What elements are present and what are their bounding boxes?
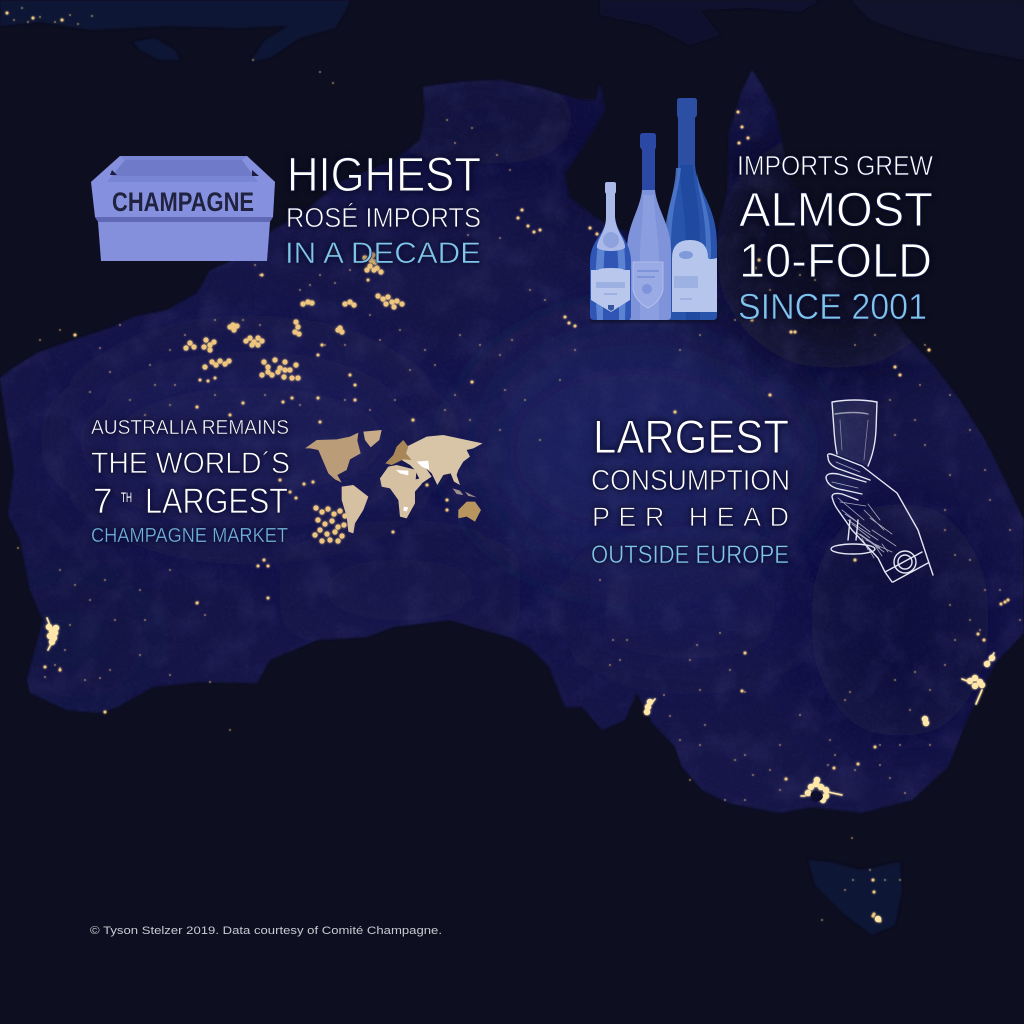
heading text block: 10-FOLD (739, 235, 932, 288)
panel: seventh largest market (91, 417, 483, 547)
heading text block: THE WORLD´S (91, 447, 290, 480)
small bottle (590, 182, 631, 320)
heading text block: IN A DECADE (285, 237, 481, 270)
heading text block: TH (121, 489, 132, 505)
panel: highest rosé imports (91, 149, 481, 270)
large bottle (664, 98, 717, 320)
land tone variation (0, 60, 1024, 830)
heading text block (285, 149, 481, 270)
heading text block: HIGHEST (287, 149, 481, 202)
medium bottle (627, 133, 671, 320)
heading text block (91, 417, 290, 547)
icon: champagne crate (91, 156, 275, 261)
heading text block: OUTSIDE EUROPE (591, 541, 789, 569)
bottle shadow (590, 318, 718, 323)
heading text block: PER HEAD (592, 502, 789, 532)
landmass of Australia (0, 70, 1024, 813)
heading text block: ROSÉ IMPORTS (286, 202, 481, 233)
panel: largest consumption per head (591, 400, 933, 582)
heading text block: SINCE 2001 (738, 286, 927, 327)
heading text block: AUSTRALIA REMAINS (91, 417, 289, 439)
heading text block: 7 (93, 482, 112, 521)
heading text block: ALMOST (739, 184, 933, 237)
heading text block: CHAMPAGNE MARKET (91, 525, 288, 547)
heading text block: CONSUMPTION (591, 465, 790, 497)
world map (305, 430, 483, 533)
heading text block: LARGEST (145, 482, 288, 521)
copyright credit: © Tyson Stelzer 2019. Data courtesy of Comité Champagne. (90, 925, 442, 937)
panel: imports grew (590, 98, 934, 327)
heading text block: IMPORTS GREW (737, 150, 934, 181)
icon: three champagne bottles (590, 98, 718, 323)
heading text block: LARGEST (593, 410, 789, 463)
heading text block (591, 410, 790, 569)
heading text block (737, 150, 934, 327)
icon: hand raising champagne flute (826, 400, 933, 582)
crate stencil label: CHAMPAGNE (112, 187, 254, 217)
